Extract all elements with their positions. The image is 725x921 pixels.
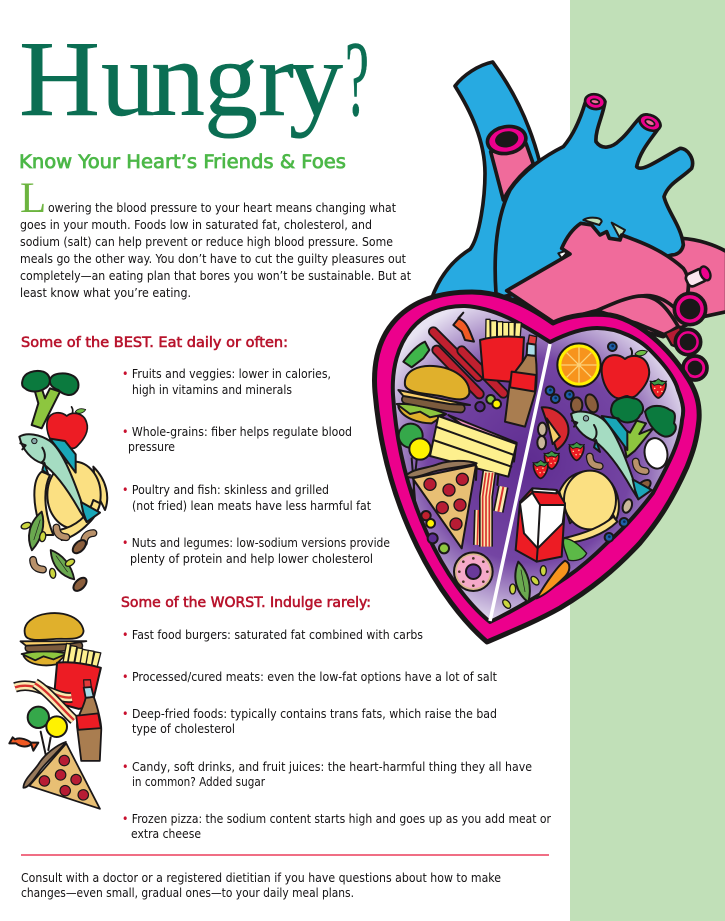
best foods list: • Fruits and veggies: lower in calories, (122, 366, 331, 381)
title: H (19, 20, 100, 139)
healthy half of the plate (501, 342, 676, 610)
worst foods list: extra cheese (131, 826, 201, 841)
green side panel (570, 0, 725, 921)
title (19, 20, 369, 139)
intro paragraph: completely—an eating plan that bores you won’t be sustainable. But at (20, 268, 411, 283)
intro paragraph: goes in your mouth. Foods low in saturated fat, cholesterol, and (20, 217, 372, 232)
worst foods list: in common? Added sugar (132, 774, 266, 789)
orange slice (557, 343, 601, 387)
worst foods list: type of cholesterol (132, 721, 235, 736)
worst foods list: • Frozen pizza: the sodium content starts high and goes up as you add meat or (122, 811, 552, 826)
intro paragraph: meals go the other way. You don’t have to cut the guilty pleasures out (20, 251, 406, 266)
best foods list: high in vitamins and minerals (132, 382, 292, 397)
icon: healthy food stack (19, 371, 107, 593)
worst foods list: • Deep-fried foods: typically contains trans fats, which raise the bad (122, 706, 497, 721)
worst foods heading: Some of the WORST. Indulge rarely: (121, 595, 371, 611)
heart interior (393, 306, 683, 622)
title: ? (345, 20, 369, 139)
icon: unhealthy food stack (9, 607, 110, 838)
carrot (537, 538, 587, 598)
heart illustration (375, 62, 725, 642)
plate divider (490, 344, 550, 621)
worst foods list: • Candy, soft drinks, and fruit juices: the heart-harmful thing they all have (122, 759, 532, 774)
donut (454, 552, 493, 591)
closing note (21, 870, 501, 900)
worst foods list: • Fast food burgers: saturated fat combined with carbs (122, 627, 423, 642)
best foods list: • Poultry and fish: skinless and grilled (122, 482, 329, 497)
best foods list: (not fried) lean meats have less harmful fat (132, 498, 371, 513)
unhealthy half of the plate (397, 313, 537, 591)
heart outline (375, 292, 699, 642)
best foods heading: Some of the BEST. Eat daily or often: (21, 335, 288, 351)
best foods list: • Whole-grains: fiber helps regulate blood (122, 424, 352, 439)
closing note: Consult with a doctor or a registered dietitian if you have questions about how to make (21, 870, 501, 885)
worst foods list (122, 627, 552, 841)
title: ungry (101, 20, 343, 139)
best foods list (122, 366, 390, 566)
milk carton (516, 488, 565, 562)
intro paragraph: L (20, 175, 46, 222)
best foods list: plenty of protein and help lower cholesterol (130, 551, 373, 566)
intro paragraph: owering the blood pressure to your heart means changing what (48, 200, 396, 215)
vessels above the heart (432, 62, 725, 380)
closing note: changes—even small, gradual ones—to your daily meal plans. (21, 885, 354, 900)
intro paragraph: sodium (salt) can help prevent or reduce high blood pressure. Some (20, 234, 393, 249)
worst foods list: • Processed/cured meats: even the low-fat options have a lot of salt (122, 669, 497, 684)
best foods list: • Nuts and legumes: low-sodium versions provide (122, 535, 390, 550)
intro paragraph (20, 175, 411, 300)
subheading: Know Your Heart’s Friends & Foes (19, 152, 346, 173)
intro paragraph: least know what you’re eating. (20, 285, 191, 300)
best foods list: pressure (128, 439, 175, 454)
